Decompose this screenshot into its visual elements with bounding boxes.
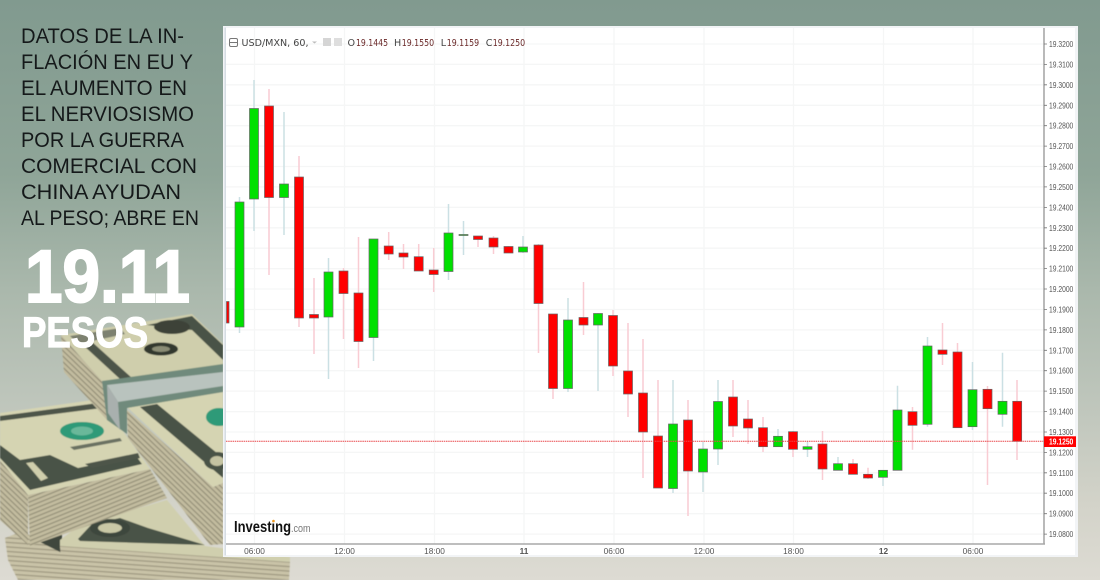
price axis labels: 19.1900 [1049,304,1074,314]
chart frame [223,26,1078,557]
price axis labels: 19.2400 [1049,202,1074,212]
legend: symbol and OHLC values: 19.1159 [447,38,479,49]
price axis labels: 19.2800 [1049,121,1074,131]
headline text: POR LA GUERRA [21,128,185,152]
current price tag: 19.1250 [1049,437,1074,447]
lower left stack of bills [0,399,167,546]
price axis labels: 19.2100 [1049,264,1074,274]
legend: symbol and OHLC values: O [348,38,356,49]
price axis labels: 19.2200 [1049,243,1074,253]
price axis labels: 19.2900 [1049,100,1074,110]
headline text: DATOS DE LA IN- [21,24,184,48]
time axis labels: 06:00 [963,546,984,556]
time axis labels [244,546,984,556]
price axis labels: 19.3100 [1049,59,1074,69]
legend: symbol and OHLC values: H [394,38,401,49]
logo: Investing.com: Investing [234,519,291,536]
legend: symbol and OHLC values: C [486,38,493,49]
headline text: AL PESO; ABRE EN [21,206,199,230]
time axis labels: 12:00 [334,546,355,556]
time axis labels: 18:00 [783,546,804,556]
legend: symbol and OHLC values: USD/MXN, 60, [242,38,308,49]
price axis labels: 19.2300 [1049,223,1074,233]
price axis labels [1049,39,1074,539]
price axis labels: 19.1500 [1049,386,1074,396]
time axis labels: 11 [520,546,529,556]
price axis labels: 19.1700 [1049,345,1074,355]
headline text [21,24,199,230]
time axis labels: 12 [879,546,888,556]
illustration: stacks of dollar bills [0,314,290,580]
big number: 19.11: 19.11 [25,235,190,318]
logo: Investing.com: .com [291,523,310,535]
time axis labels: 18:00 [424,546,445,556]
price axis labels: 19.2500 [1049,182,1074,192]
price axis labels: 19.0900 [1049,509,1074,519]
candlesticks [226,80,1022,516]
price axis labels: 19.1400 [1049,407,1074,417]
price axis labels: 19.2600 [1049,162,1074,172]
headline text: EL AUMENTO EN [21,76,187,100]
time axis labels: 12:00 [694,546,715,556]
price axis labels: 19.1100 [1049,468,1074,478]
price axis labels: 19.2700 [1049,141,1074,151]
price axis labels: 19.3000 [1049,80,1074,90]
price axis labels: 19.0800 [1049,529,1074,539]
upper right stack of bills [61,314,232,545]
price axis labels: 19.1000 [1049,488,1074,498]
headline text: CHINA AYUDAN [21,180,181,204]
price axis labels: 19.1600 [1049,366,1074,376]
headline text: FLACIÓN EN EU Y [21,49,193,74]
paper band around stack [102,364,223,434]
legend: symbol and OHLC values [230,38,525,49]
bottom stack of bills [5,500,290,580]
panel: candlestick chart [223,26,1078,557]
price axis labels: 19.2000 [1049,284,1074,294]
price axis labels: 19.1200 [1049,447,1074,457]
axes [226,28,1047,544]
price axis labels: 19.1300 [1049,427,1074,437]
price axis labels: 19.1800 [1049,325,1074,335]
legend: symbol and OHLC values: 19.1250 [493,38,525,49]
legend: symbol and OHLC values: 19.1445 [356,38,388,49]
headline text: COMERCIAL CON [21,154,197,178]
time axis labels: 06:00 [244,546,265,556]
legend: symbol and OHLC values: 19.1550 [402,38,434,49]
legend: symbol and OHLC values: L [441,38,447,49]
big label: PESOS: PESOS [22,309,148,357]
time axis labels: 06:00 [604,546,625,556]
headline text: EL NERVIOSISMO [21,102,194,126]
price axis labels: 19.3200 [1049,39,1074,49]
current price line [226,440,1044,442]
